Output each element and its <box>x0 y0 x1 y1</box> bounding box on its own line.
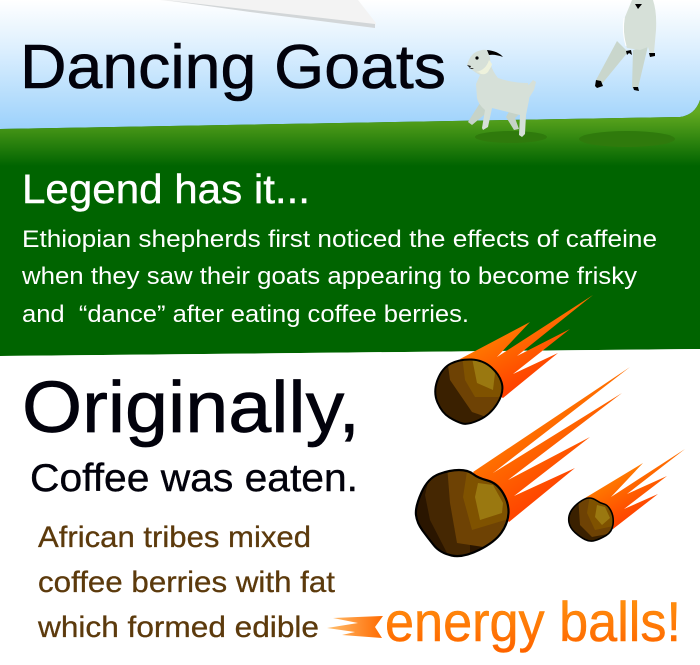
icon: standing goat <box>467 50 536 137</box>
legend text block: when they saw their goats appearing to become frisky <box>21 263 638 290</box>
coffee ball <box>568 497 614 542</box>
energy balls text: energy balls! <box>385 590 681 653</box>
goat shadows <box>475 131 675 147</box>
paper plane corner <box>160 0 376 28</box>
icon: small flame <box>327 616 383 638</box>
icon: meteor three <box>568 449 685 542</box>
heading: legend: Legend has it... <box>22 166 310 212</box>
brown text block <box>37 521 336 644</box>
heading: originally: Originally, <box>22 368 360 448</box>
sky background <box>0 0 700 135</box>
icon: meteor one <box>434 295 593 425</box>
brown text block: African tribes mixed <box>38 521 311 554</box>
legend text block: Ethiopian shepherds first noticed the effects of caffeine <box>22 226 657 253</box>
green hill and panel <box>0 100 700 356</box>
hill gradient <box>0 100 700 170</box>
icon: jumping goat <box>595 0 656 91</box>
icon: meteor two <box>405 367 630 565</box>
white lower background <box>0 349 700 665</box>
legend text block: and “dance” after eating coffee berries. <box>22 301 469 328</box>
coffee ball <box>414 468 510 558</box>
subheading: Coffee was eaten. <box>30 457 358 500</box>
flame trail <box>473 367 630 522</box>
flame trail <box>585 449 685 529</box>
legend text block <box>21 226 657 328</box>
title: Dancing Goats <box>20 33 446 102</box>
flame trail <box>460 295 593 398</box>
coffee ball <box>434 358 504 425</box>
brown text block: coffee berries with fat <box>38 566 336 599</box>
brown text block: which formed edible <box>37 611 319 644</box>
